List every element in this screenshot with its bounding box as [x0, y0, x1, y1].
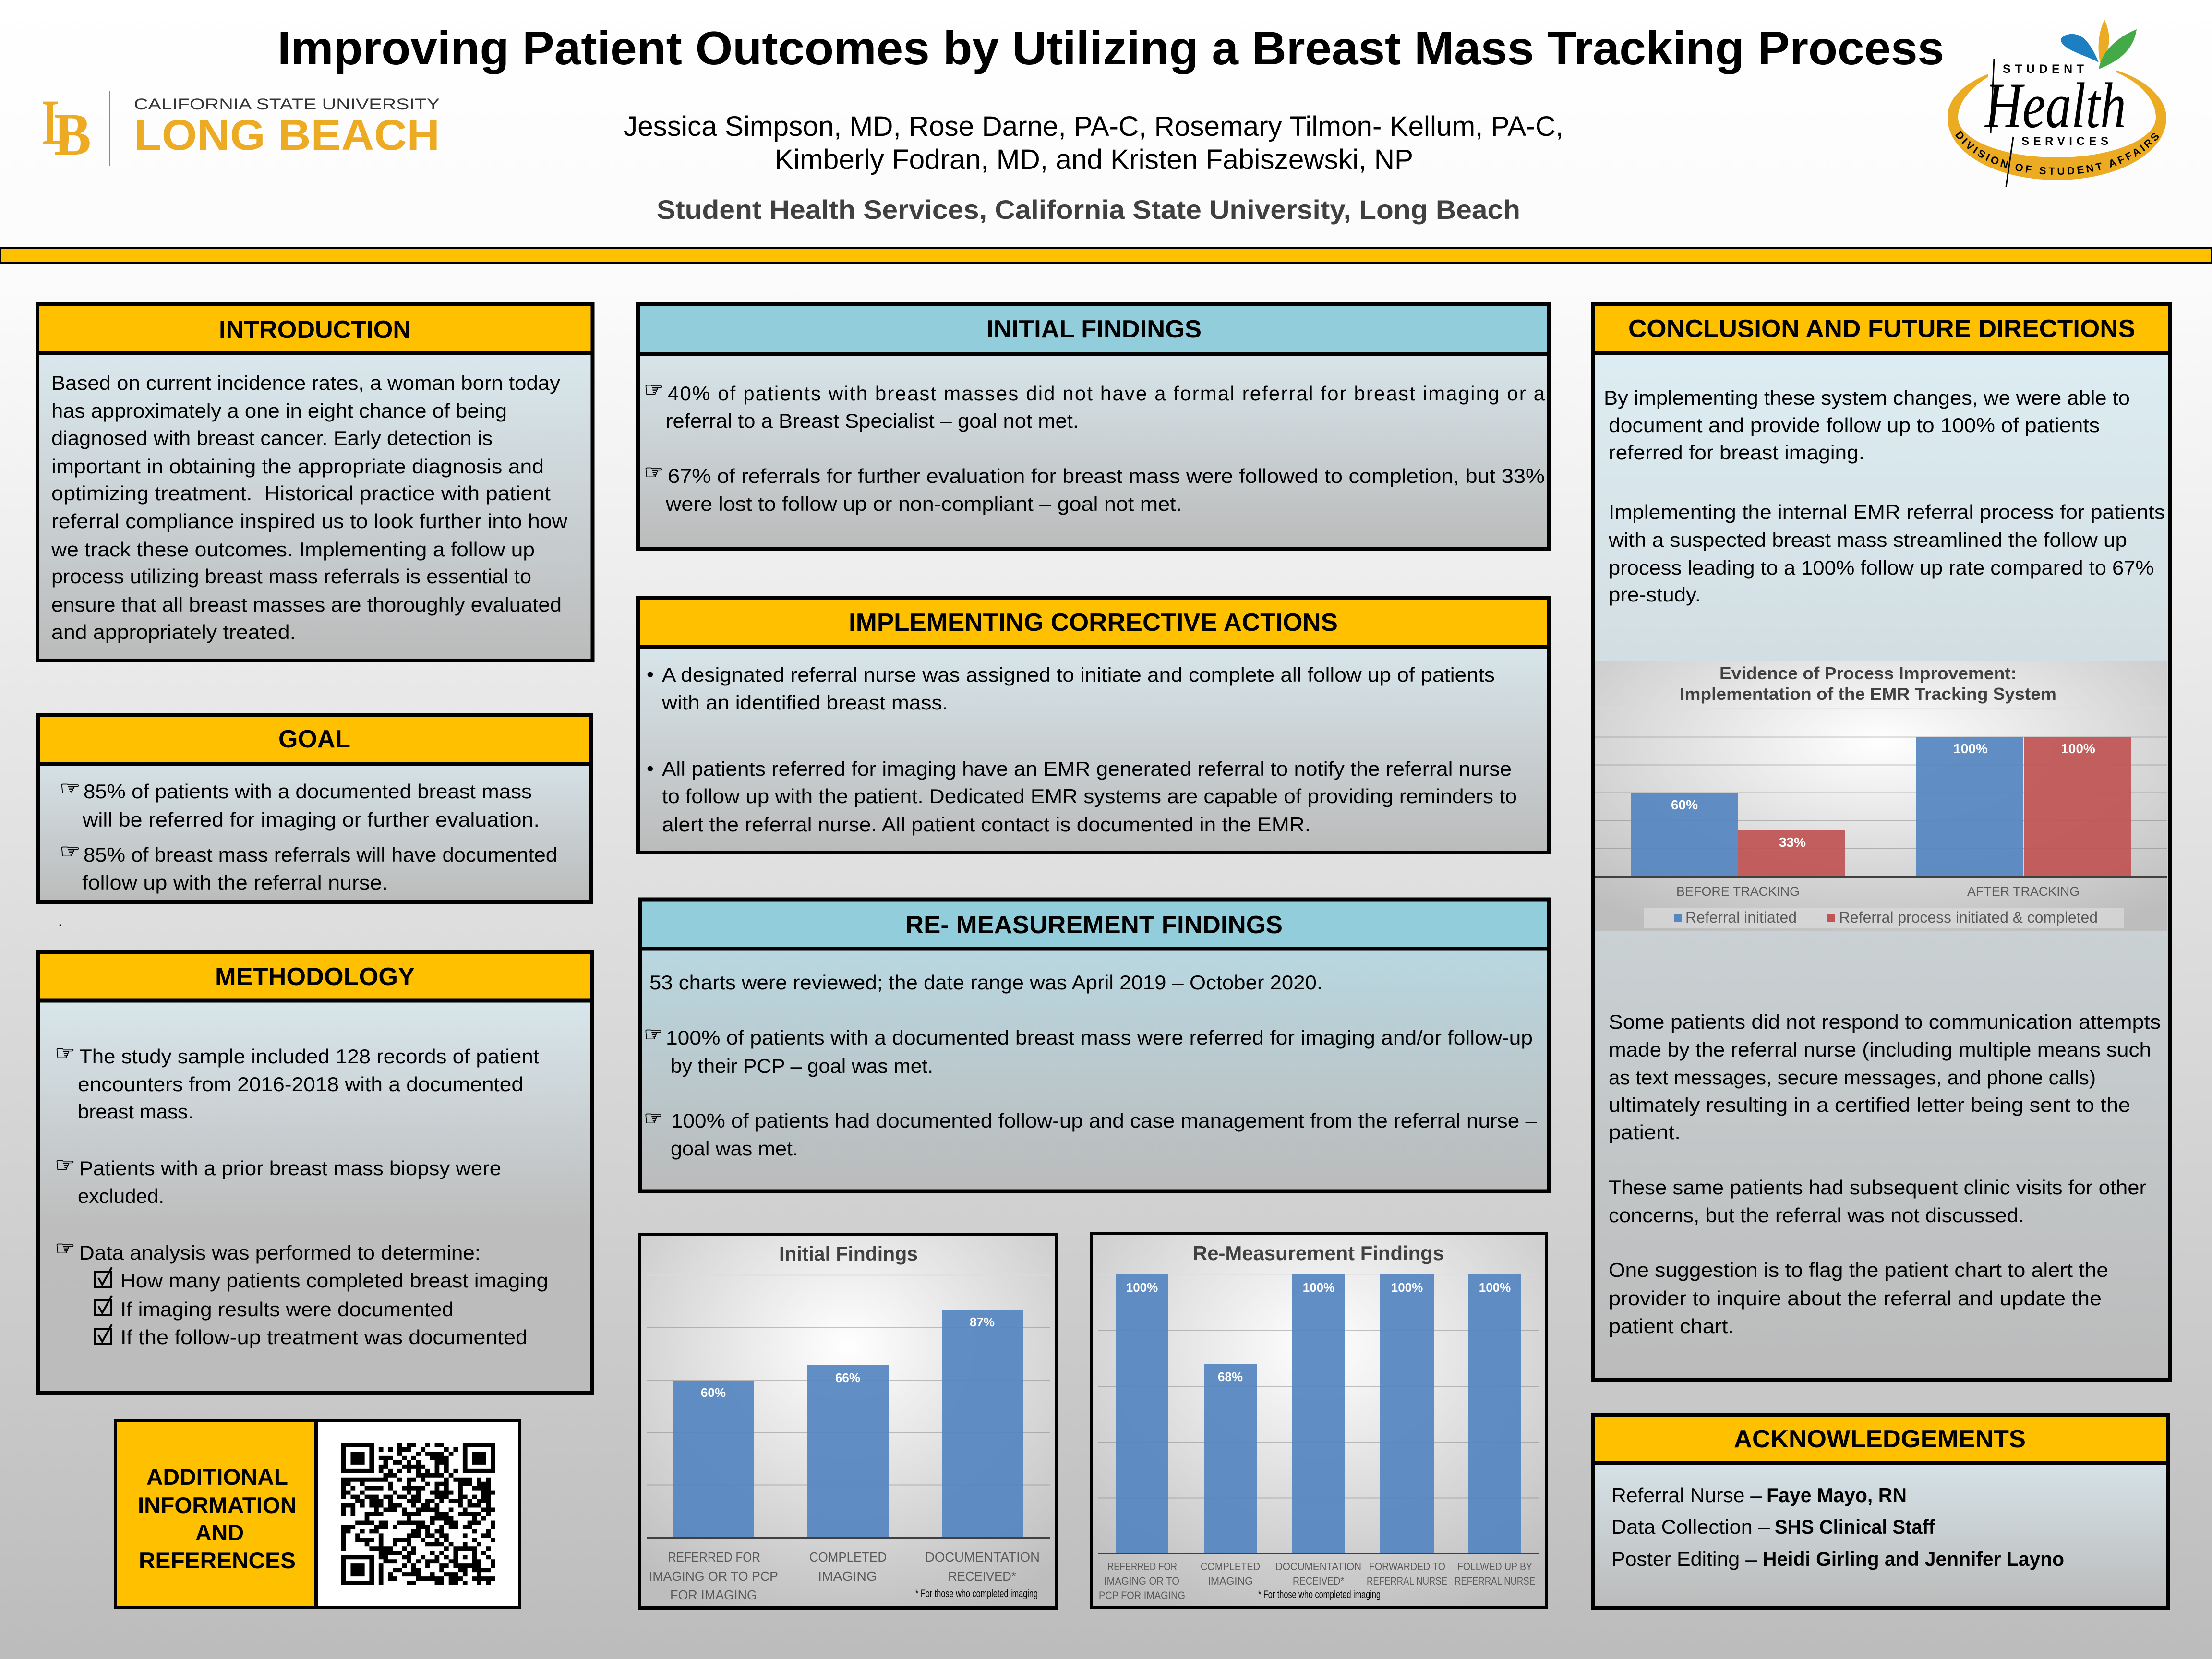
text: goal items: follow up with the referral nurse.: [82, 871, 388, 894]
panel: methodology: [38, 952, 592, 1393]
text: conclusion upper: process leading to a 100% follow up rate compared to 67%: [1609, 556, 2154, 579]
axis labels: initial findings: IMAGING OR TO PCP: [649, 1569, 778, 1584]
text: methodology items: excluded.: [78, 1185, 164, 1207]
text: corrective actions items: A designated referral nurse was assigned to initiate and complete all follow up of patients: [662, 663, 1495, 686]
logo: Student Health Services: [1948, 20, 2166, 187]
legend: [1644, 908, 2124, 928]
heading: initial findings: INITIAL FINDINGS: [986, 315, 1202, 343]
axis labels: re-measurement findings: COMPLETED: [1201, 1561, 1260, 1573]
text: goal items: ☞: [60, 840, 81, 863]
text: additional information: INFORMATION: [138, 1492, 297, 1518]
text: methodology items: Patients with a prior breast mass biopsy were: [79, 1157, 501, 1179]
axis labels: initial findings: FOR IMAGING: [670, 1587, 757, 1602]
chart title: initial findings: Initial Findings: [779, 1242, 918, 1265]
bar chart: re-measurement findings: 100%: [1303, 1280, 1334, 1295]
panel: conclusion and future directions: [1593, 304, 2170, 1380]
heading: implementing corrective actions: IMPLEMENTING CORRECTIVE ACTIONS: [849, 609, 1338, 637]
text: conclusion upper: pre-study.: [1609, 583, 1701, 606]
text: conclusion lower: One suggestion is to flag the patient chart to alert the: [1609, 1259, 2108, 1281]
axis labels: initial findings: * For those who completed imaging: [915, 1587, 1038, 1599]
axis labels: re-measurement findings: IMAGING OR TO: [1104, 1575, 1179, 1587]
text: re-measurement items: ☞: [644, 1022, 663, 1046]
bar chart: evidence of process improvement: AFTER TRACKING: [1967, 884, 2080, 899]
text: introduction body: optimizing treatment. Historical practice with patient: [51, 482, 551, 505]
text: introduction body: has approximately a one in eight chance of being: [51, 399, 507, 422]
text: initial findings items: ☞: [644, 460, 664, 484]
axis labels: initial findings: REFERRED FOR: [668, 1550, 760, 1564]
chart title: evidence of process improvement: [1680, 663, 2056, 704]
legend: Referral initiated: [1685, 909, 1797, 926]
text: methodology items: The study sample included 128 records of patient: [79, 1045, 539, 1068]
panel: goal: [38, 715, 591, 902]
text: additional information: [138, 1464, 297, 1573]
text: conclusion lower: provider to inquire about the referral and update the: [1609, 1287, 2102, 1310]
text: conclusion lower: patient chart.: [1609, 1315, 1734, 1337]
text: corrective actions items: [647, 663, 1517, 836]
title: Improving Patient Outcomes by Utilizing a Breast Mass Tracking Process: [277, 22, 1944, 74]
text: goal items: 85% of breast mass referrals will have documented: [84, 843, 557, 866]
text: methodology items: ☞: [55, 1041, 75, 1065]
authors: Kimberly Fodran, MD, and Kristen Fabiszewski, NP: [775, 144, 1413, 175]
bar chart: evidence of process improvement: 100%: [2061, 741, 2095, 756]
text: initial findings items: were lost to follow up or non-compliant – goal not met.: [665, 493, 1182, 515]
text: methodology items: [55, 1041, 539, 1264]
text: re-measurement items: 53 charts were reviewed; the date range was April 2019 – October 2020.: [649, 971, 1322, 994]
panel: re-measurement findings: [640, 900, 1549, 1191]
axis labels: re-measurement findings: REFERRED FOR: [1107, 1561, 1177, 1573]
text: conclusion upper: [1604, 386, 2165, 606]
chart title: evidence of process improvement: Evidence of Process Improvement:: [1719, 663, 2017, 683]
bar chart: initial findings: 66%: [835, 1370, 860, 1385]
text: conclusion upper: document and provide follow up to 100% of patients: [1609, 414, 2100, 436]
text: goal items: [60, 777, 557, 894]
text: introduction body: referral compliance inspired us to look further into how: [51, 510, 568, 532]
text: conclusion lower: concerns, but the referral was not discussed.: [1609, 1204, 2024, 1226]
icon: checkbox list: If imaging results were documented: [120, 1298, 454, 1321]
panel: implementing corrective actions: [638, 598, 1549, 853]
bar chart: re-measurement findings: 100%: [1126, 1280, 1158, 1295]
bar chart: re-measurement findings: [1092, 1234, 1547, 1607]
icon: checkbox list: [95, 1267, 548, 1348]
icon: checkbox list: How many patients completed breast imaging: [120, 1269, 548, 1292]
text: initial findings items: 40% of patients with breast masses did not have a formal referral for breast imaging or a: [668, 382, 1545, 405]
text: conclusion lower: These same patients had subsequent clinic visits for other: [1609, 1176, 2146, 1199]
heading: conclusion: CONCLUSION AND FUTURE DIRECTIONS: [1628, 315, 2135, 343]
gold divider bar: [0, 248, 2212, 263]
panel: acknowledgements: [1593, 1415, 2168, 1608]
axis labels: re-measurement findings: FOLLWED UP BY: [1457, 1561, 1532, 1573]
text: introduction body: process utilizing breast mass referrals is essential to: [51, 565, 531, 588]
text: acknowledgement names: Referral Nurse –: [1611, 1484, 1762, 1506]
heading: methodology: METHODOLOGY: [215, 963, 415, 991]
panel: additional information and QR code: [115, 1421, 520, 1607]
text: goal items: ☞: [60, 777, 81, 800]
bar chart: evidence of process improvement: 100%: [1953, 741, 1988, 756]
text: conclusion lower: [1609, 1010, 2161, 1337]
axis labels: re-measurement findings: IMAGING: [1208, 1575, 1253, 1587]
text: goal items: 85% of patients with a documented breast mass: [84, 780, 532, 803]
text: introduction body: diagnosed with breast cancer. Early detection is: [51, 427, 493, 449]
logo: CSU Long Beach: CALIFORNIA STATE UNIVERSITY: [134, 96, 440, 113]
bar chart: evidence of process improvement: 60%: [1671, 797, 1698, 812]
axis labels: re-measurement findings: [1099, 1561, 1535, 1601]
text: conclusion upper: with a suspected breast mass streamlined the follow up: [1608, 529, 2127, 551]
text: re-measurement items: 100% of patients with a documented breast mass were referred for imaging and/or follow-up: [666, 1026, 1533, 1049]
icon: checkbox list: If the follow-up treatment was documented: [120, 1326, 528, 1348]
bar chart: evidence of process improvement: [1595, 661, 2167, 931]
text: conclusion upper: By implementing these system changes, we were able to: [1604, 386, 2130, 409]
panel: initial findings: [638, 304, 1549, 549]
logo: Student Health Services: DIVISION OF STUDENT AFFAIRS: [1955, 131, 2159, 175]
text: corrective actions items: to follow up with the patient. Dedicated EMR systems are capable of providing reminders to: [662, 785, 1517, 807]
text: introduction body: we track these outcomes. Implementing a follow up: [51, 538, 535, 561]
text: additional information: AND: [195, 1520, 244, 1545]
text: re-measurement items: 100% of patients had documented follow-up and case management from the referral nurse –: [671, 1109, 1538, 1132]
text: conclusion upper: Implementing the internal EMR referral process for patients: [1609, 501, 2165, 523]
heading: introduction: INTRODUCTION: [219, 316, 411, 344]
text: introduction body: important in obtaining the appropriate diagnosis and: [51, 455, 544, 478]
text: initial findings items: 67% of referrals for further evaluation for breast mass were followed to completion, but 33%: [668, 465, 1545, 487]
axis labels: re-measurement findings: REFERRAL NURSE: [1367, 1575, 1447, 1587]
text: corrective actions items: •: [647, 663, 654, 685]
axis labels: re-measurement findings: FORWARDED TO: [1369, 1561, 1445, 1573]
logo: Student Health Services: STUDENT: [2003, 62, 2084, 76]
text: corrective actions items: •: [647, 757, 654, 780]
bar chart: evidence of process improvement: 33%: [1779, 835, 1806, 850]
text: acknowledgement names: Faye Mayo, RN: [1767, 1484, 1907, 1506]
text: conclusion upper: referred for breast imaging.: [1609, 441, 1864, 464]
logo: CSU Long Beach: [42, 87, 440, 168]
authors: [624, 111, 1563, 175]
bar chart: initial findings: [639, 1235, 1057, 1608]
text: re-measurement items: ☞: [644, 1106, 663, 1130]
bar chart: initial findings: 60%: [701, 1385, 726, 1400]
text: additional information: ADDITIONAL: [146, 1464, 288, 1490]
bar chart: initial findings: 87%: [970, 1315, 995, 1329]
text: initial findings items: [644, 378, 1545, 515]
logo: CSU Long Beach: L: [42, 87, 71, 158]
text: goal items: will be referred for imaging or further evaluation.: [82, 808, 540, 831]
text: .: [58, 908, 63, 931]
logo: Student Health Services: SERVICES: [2021, 135, 2108, 148]
axis labels: initial findings: RECEIVED*: [948, 1569, 1016, 1584]
text: methodology items: ☞: [55, 1237, 75, 1260]
logo: Student Health Services: Health: [1984, 70, 2126, 142]
bar chart: re-measurement findings: 100%: [1391, 1280, 1423, 1295]
text: acknowledgement names: Poster Editing –: [1611, 1548, 1757, 1570]
text: methodology items: Data analysis was performed to determine:: [79, 1241, 481, 1264]
text: acknowledgement names: [1611, 1484, 2064, 1570]
text: initial findings items: ☞: [644, 378, 664, 401]
text: conclusion lower: patient.: [1609, 1121, 1681, 1143]
text: corrective actions items: alert the referral nurse. All patient contact is documented in the EMR.: [662, 813, 1310, 836]
text: conclusion lower: ultimately resulting in a certified letter being sent to the: [1609, 1094, 2130, 1116]
text: conclusion lower: as text messages, secure messages, and phone calls): [1609, 1066, 2096, 1089]
panel: introduction: [37, 304, 592, 661]
text: additional information: REFERENCES: [139, 1548, 296, 1573]
bar chart: evidence of process improvement: BEFORE TRACKING: [1676, 884, 1800, 899]
text: corrective actions items: with an identified breast mass.: [661, 691, 948, 714]
affiliation: Student Health Services, California State University, Long Beach: [657, 194, 1520, 225]
chart title: re-measurement findings: Re-Measurement Findings: [1193, 1242, 1444, 1264]
text: re-measurement items: [644, 971, 1538, 1160]
logo: CSU Long Beach: B: [54, 102, 91, 168]
text: introduction body: and appropriately treated.: [51, 621, 296, 643]
axis labels: initial findings: [649, 1550, 1040, 1602]
axis labels: initial findings: COMPLETED: [809, 1550, 887, 1564]
text: corrective actions items: All patients referred for imaging have an EMR generated referral to notify the referral nurse: [662, 757, 1512, 780]
legend: Referral process initiated & completed: [1839, 909, 2098, 926]
axis labels: initial findings: IMAGING: [818, 1569, 877, 1584]
authors: Jessica Simpson, MD, Rose Darne, PA-C, Rosemary Tilmon- Kellum, PA-C,: [624, 111, 1563, 142]
axis labels: initial findings: DOCUMENTATION: [925, 1550, 1040, 1564]
heading: acknowledgements: ACKNOWLEDGEMENTS: [1734, 1425, 2026, 1453]
text: introduction body: [51, 372, 568, 643]
text: acknowledgement names: Heidi Girling and Jennifer Layno: [1763, 1548, 2064, 1570]
axis labels: re-measurement findings: * For those who completed imaging: [1258, 1588, 1381, 1600]
text: introduction body: Based on current incidence rates, a woman born today: [51, 372, 560, 394]
text: conclusion lower: made by the referral nurse (including multiple means such: [1609, 1038, 2151, 1061]
text: acknowledgement names: Data Collection –: [1611, 1515, 1770, 1538]
text: conclusion lower: Some patients did not respond to communication attempts: [1609, 1010, 2161, 1033]
axis labels: re-measurement findings: DOCUMENTATION: [1275, 1561, 1361, 1573]
axis labels: re-measurement findings: PCP FOR IMAGING: [1099, 1589, 1185, 1601]
text: introduction body: ensure that all breast masses are thoroughly evaluated: [51, 593, 562, 616]
text: methodology items: ☞: [55, 1153, 75, 1177]
text: acknowledgement names: SHS Clinical Staff: [1775, 1515, 1936, 1538]
heading: re-measurement findings: RE- MEASUREMENT FINDINGS: [905, 911, 1283, 939]
text: methodology items: encounters from 2016-2018 with a documented: [78, 1073, 523, 1095]
text: re-measurement items: by their PCP – goal was met.: [671, 1055, 933, 1077]
bar chart: re-measurement findings: 68%: [1218, 1370, 1243, 1384]
text: methodology items: breast mass.: [78, 1100, 193, 1123]
text: re-measurement items: goal was met.: [671, 1137, 798, 1160]
logo: CSU Long Beach: LONG BEACH: [134, 111, 440, 159]
axis labels: re-measurement findings: REFERRAL NURSE: [1455, 1575, 1535, 1587]
text: initial findings items: referral to a Breast Specialist – goal not met.: [666, 409, 1079, 432]
icon: QR code: [341, 1443, 495, 1585]
bar chart: re-measurement findings: 100%: [1479, 1280, 1511, 1295]
chart title: evidence of process improvement: Implementation of the EMR Tracking System: [1680, 684, 2056, 704]
heading: goal: GOAL: [278, 725, 350, 753]
axis labels: re-measurement findings: RECEIVED*: [1293, 1575, 1344, 1587]
